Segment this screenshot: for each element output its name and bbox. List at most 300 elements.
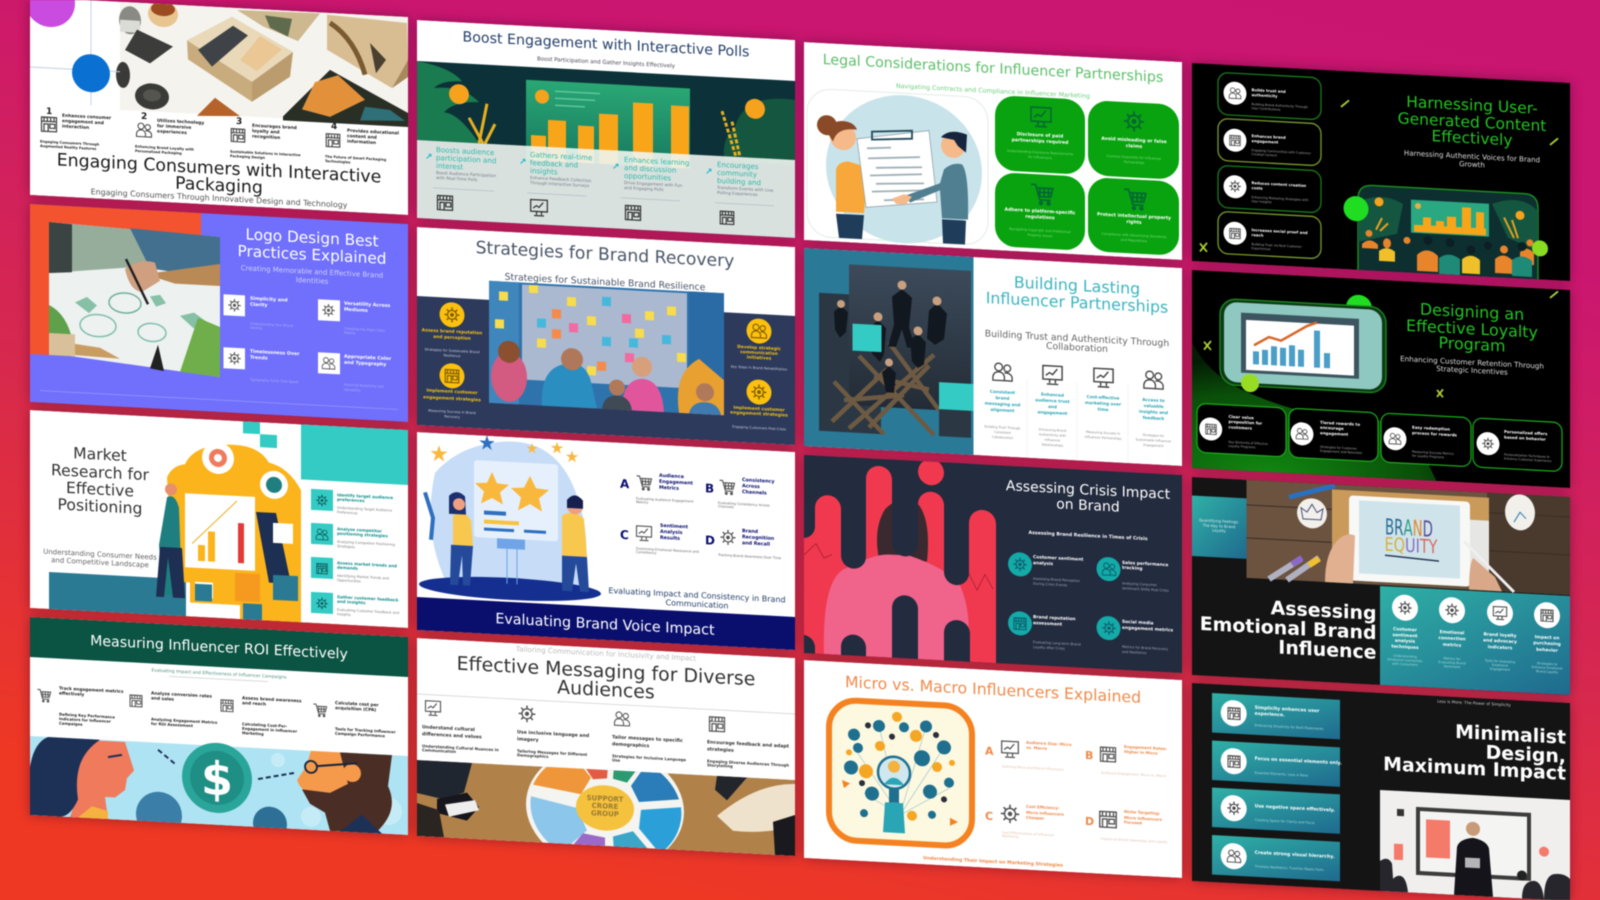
slide: Market Research for Effective Positioning (30, 410, 408, 628)
item C (985, 802, 1065, 841)
metric: customer sentiment: Customer sentiment (1033, 554, 1083, 563)
title (238, 228, 386, 265)
benefit 2: Relationships (1042, 443, 1063, 448)
list item 1: Preferences (337, 510, 358, 515)
item A: A (985, 745, 994, 758)
benefit 3: Measuring Success in (1086, 430, 1120, 436)
metric 3: Engagement in Influencer (242, 726, 297, 734)
item D (705, 526, 781, 560)
metric: sales performance (1096, 556, 1169, 593)
metric: social media (1096, 615, 1174, 657)
item 1: engagement and (62, 118, 104, 126)
item 2: Utilizes technology (157, 118, 204, 126)
item 4: The Future of Smart Packaging (325, 155, 387, 162)
decorative marks (1200, 92, 1558, 270)
subtitle: Growth (1459, 159, 1485, 169)
item: versatility: Versatility Across (344, 301, 391, 309)
card 1: Disclosure of paid (1017, 131, 1063, 140)
card 3: Enhancing Marketing Strategies with (1252, 195, 1308, 202)
rating illustration: ★ (429, 442, 449, 468)
title: Strategies for Brand Recovery (476, 238, 734, 272)
metric: social media: engagement metrics (1122, 625, 1174, 634)
item 4: information (347, 139, 376, 146)
handshake illustration (807, 88, 988, 248)
card 2 (1218, 118, 1321, 166)
left item 2: engagement strategies (423, 394, 481, 403)
product photo (116, 0, 408, 127)
item 4: Technologies (325, 159, 351, 164)
card 3: Property Issues (1027, 233, 1053, 238)
lime circle (1532, 240, 1548, 257)
title: Assessing (1271, 597, 1377, 625)
right item 1: initiatives (747, 354, 772, 362)
card 4 (1473, 418, 1562, 472)
metric 4 (1532, 601, 1562, 675)
point 4: Polling Experiences (717, 190, 758, 197)
item 4: 4 (331, 122, 337, 132)
item C: Sentiment (660, 523, 689, 530)
metric: social media: and Resilience (1122, 650, 1147, 655)
card 3: Adhere to platform-specific (1005, 207, 1076, 216)
card 4: and Regulations (1121, 238, 1148, 243)
metric 1: Customer (1393, 626, 1418, 633)
item B: Audience Engagement: Micro vs. Macro (1101, 771, 1166, 778)
orange illustration (156, 439, 301, 622)
card 1: for Influencers (1028, 155, 1052, 160)
point 2: ↗ (519, 157, 527, 168)
benefit 2: Authenticity with (1039, 432, 1066, 438)
card 2: Partnerships (1124, 160, 1145, 165)
point 4: community (717, 168, 757, 179)
card 2: Created Content (1252, 152, 1278, 158)
bar 1: Embracing Simplicity for Bold Statements (1255, 723, 1324, 731)
metric 4: Enhance Emotional (1532, 665, 1562, 671)
metric: customer sentiment: analysis (1033, 560, 1054, 567)
card 4: Personalization Techniques to (1504, 453, 1550, 459)
column 4 (707, 717, 790, 772)
teamwork photo (819, 263, 971, 439)
bar 2 (1212, 741, 1342, 787)
card 3 (1218, 165, 1321, 213)
subtitle: Identities (296, 276, 329, 286)
card 2 (1088, 100, 1179, 180)
benefit 4: Strategies for (1143, 433, 1165, 438)
left item 1: Resilience (443, 353, 461, 358)
item B: Consistency (742, 477, 775, 485)
title: Audiences (557, 676, 655, 704)
subtitle: Engaging Consumers Through Innovative Design and Technology (91, 187, 348, 210)
bar 2: Focus on essential elements only. (1255, 756, 1342, 766)
slide: Building Lasting Influencer Partnerships (804, 248, 1182, 466)
item: timelessness: Typography Fonts That Speak (249, 378, 299, 384)
metric: sales performance: Sentiment Shifts Post-Crisis (1122, 586, 1169, 593)
item D: Micro Influencers (1124, 815, 1163, 822)
point 3: opportunities (624, 171, 671, 182)
column 2: imagery (517, 736, 539, 743)
metric: customer sentiment: Assessing Brand Perception (1033, 577, 1080, 583)
metric 2: Sentiment (1444, 664, 1461, 669)
point 2: Gathers real-time (530, 150, 592, 162)
metric 4: Campaign Performance (335, 731, 385, 738)
item: simplicity: Understanding Your Brand (250, 322, 293, 328)
card 4 (1218, 211, 1321, 259)
subtitle (1400, 354, 1544, 379)
crosshair lines (30, 0, 120, 107)
right item 2 (730, 378, 788, 432)
item A (985, 738, 1072, 772)
right item 1: Key Steps in Brand Rehabilitation (731, 365, 787, 372)
list item 2: Analyzing Competitor Positioning (337, 540, 395, 547)
item: simplicity: Identity (250, 326, 263, 330)
card 2: Engagement and Retention (1320, 449, 1362, 455)
point 2: Through Interactive Surveys (529, 180, 589, 188)
point 4: ↗ (705, 167, 713, 178)
bar 4 (1212, 835, 1340, 881)
benefit 4: Access to (1142, 397, 1165, 403)
metric 1: with Consumers (1392, 662, 1418, 667)
item B: Engagement Rates: (1124, 744, 1167, 751)
slide: Micro vs. Macro Influencers Explained (804, 660, 1182, 878)
metric 2 (1438, 597, 1466, 669)
column 2 (517, 705, 589, 761)
title: Practices Explained (238, 242, 386, 268)
title (1006, 478, 1171, 518)
metric: brand reputation: assessment (1033, 620, 1062, 628)
item D (1085, 807, 1167, 844)
card 3: Measuring Success Metrics (1412, 450, 1454, 456)
metric 4: Impact on (1535, 634, 1559, 641)
card 3: User Insights (1252, 199, 1272, 204)
subtitle: Understanding Consumer Needs (43, 548, 157, 562)
card 1: Builds trust and (1252, 87, 1286, 94)
item 2: Personalized Packaging (135, 149, 182, 156)
metric 3: indicators (1488, 644, 1513, 651)
metric: brand reputation: Evaluating Long-term Brand (1033, 640, 1081, 647)
item D: D (1085, 815, 1094, 828)
card 2: claims (1126, 143, 1143, 150)
item A: Metrics (659, 485, 679, 492)
slide: Evaluating Brand Voice Impact (417, 427, 795, 650)
column 2: Demographics (517, 752, 549, 759)
title: Influence (1278, 637, 1377, 664)
brand equity photo: EQUITY (1384, 534, 1438, 558)
title (1406, 299, 1538, 357)
left item 2 (423, 362, 481, 420)
item D: and Recall (742, 540, 770, 548)
rating illustration: ★ (478, 430, 496, 455)
benefit 4 (1136, 370, 1172, 448)
green glow shape (1192, 342, 1437, 487)
item: versatility: Mediums (344, 307, 368, 314)
point 2: Enhance Feedback Collection (530, 175, 592, 183)
metric 3: Assess brand awareness (242, 695, 302, 704)
list item 1: preferences (337, 497, 365, 503)
teal side panel (804, 248, 974, 455)
list item 3 (311, 557, 397, 585)
card 4: based on behavior (1504, 435, 1546, 442)
metric 1: effectively (59, 691, 85, 698)
decorative marks (1204, 273, 1558, 403)
card 2: engagement (1252, 138, 1279, 145)
metric 3: and reach (242, 700, 266, 707)
subtitle (43, 548, 157, 570)
item 3 (230, 117, 301, 162)
subtitle: Strategies for Sustainable Brand Resilience (505, 272, 706, 293)
item 3: 3 (236, 117, 242, 127)
item 1: interaction (62, 123, 89, 131)
subtitle: Strategic Incentives (1436, 364, 1508, 377)
column 4: strategies (707, 746, 734, 754)
point 4 (705, 159, 774, 227)
item: timelessness: Timelessness Over (250, 349, 300, 357)
point 3: and Engaging Polls (624, 185, 664, 192)
subtitle (985, 329, 1169, 358)
item A: Defining Micro and Macro Influencers (1002, 764, 1064, 772)
bar 4: Create strong visual hierarchy. (1255, 850, 1335, 860)
item: simplicity: Simplicity and (250, 296, 288, 304)
column 3: demographics (612, 741, 650, 749)
metric 3: Engagement (1490, 667, 1511, 672)
point 4: building and (717, 176, 761, 187)
subtitle: Navigating Contracts and Compliance in Influencer Marketing (896, 83, 1090, 100)
card 4: Protect intellectual property (1097, 212, 1171, 221)
header band (30, 617, 408, 677)
point 1: ↗ (425, 152, 433, 163)
title: on Brand (1056, 496, 1120, 516)
metric: customer sentiment (1008, 552, 1083, 588)
card 1: Key Elements of Effective (1228, 440, 1268, 446)
column 1: Communication (422, 747, 456, 754)
item 4: Provides educational (347, 128, 400, 137)
title: Logo Design Best (245, 225, 379, 250)
card 2: engagement (1320, 430, 1348, 437)
slide: Designing an Effective Loyalty Program (1192, 270, 1570, 494)
item C: Micro Influencers (1026, 810, 1065, 817)
point 4: Encourages (717, 160, 759, 171)
title: Assessing Crisis Impact (1006, 478, 1171, 503)
list item 1: Identify target audience (337, 492, 393, 500)
circle: purple (25, 0, 75, 28)
overline: Tailoring Communication for Inclusivity and Impact (515, 644, 696, 663)
slide: Logo Design Best Practices Explained (30, 204, 408, 422)
bar 3 (1212, 788, 1340, 834)
teal corner panel (301, 424, 408, 485)
metric: social media: Metrics for Brand Recovery (1122, 645, 1168, 651)
item B: Channels (742, 489, 767, 497)
column 3: Tailor messages to specific (612, 734, 683, 744)
list item 1 (311, 489, 393, 517)
item A: Engagement (659, 479, 694, 487)
title: Emotional Brand (1200, 613, 1377, 644)
left item 1 (422, 301, 482, 359)
point 2: insights (530, 166, 558, 176)
title: Engaging Consumers with Interactive (57, 150, 381, 188)
metric 1: Defining Key Performance (59, 712, 115, 720)
metric 2: for ROI Assessment (151, 721, 193, 728)
card 3: Reduces content creation (1252, 180, 1307, 188)
metric 1: techniques (1391, 644, 1419, 651)
teal left panel (1192, 496, 1246, 559)
point 1 (425, 144, 496, 213)
card 1: partnerships required (1012, 137, 1068, 146)
column 4: Engaging Diverse Audiences Through (707, 758, 789, 768)
item C: Cost-Effectiveness of Influencer (1002, 830, 1055, 837)
metric: brand reputation: Brand reputation (1033, 614, 1075, 622)
benefit 3: Cost-effective (1087, 394, 1120, 401)
item A: Audience (659, 473, 685, 480)
item D: Tracking Brand Awareness Over Time (717, 553, 781, 560)
bar 3: Use negative space effectively. (1255, 803, 1335, 814)
left item 2: Implement customer (426, 387, 478, 396)
item D: Impact on Brand Awareness and Loyalty (1101, 837, 1167, 844)
item 3: Packaging Design (230, 154, 266, 160)
column 2: Use inclusive language and (517, 729, 589, 739)
column 3: Strategies for Inclusive Language (612, 753, 686, 762)
metric: brand reputation: Loyalty After Crisis (1033, 645, 1065, 651)
item B (1085, 742, 1167, 778)
item C: C (985, 810, 993, 823)
item C: Consistency (636, 550, 657, 555)
card 1: customers (1228, 424, 1253, 431)
benefit 4: insights and (1139, 409, 1168, 415)
left item 1: Strategies for Sustainable Brand (424, 347, 480, 354)
point 2 (519, 149, 592, 219)
right item 2: Engaging Customers Post-Crisis (732, 425, 786, 432)
card 4: Increases social proof and (1252, 227, 1308, 235)
metric 4: purchasing (1533, 640, 1561, 648)
subtitle: Creating Memorable and Effective Brand (241, 264, 383, 280)
subtitle (1404, 148, 1540, 172)
rating illustration: ★ (565, 447, 579, 467)
item C: Analysis (660, 529, 683, 536)
green circle (1344, 196, 1368, 222)
title: Market (73, 444, 127, 465)
item B: Channels (718, 504, 734, 509)
item D: Focused (1124, 819, 1142, 825)
metric: brand reputation (1008, 611, 1081, 652)
item D: Brand (742, 528, 759, 535)
bar 1 (1212, 693, 1340, 739)
orange block (30, 204, 201, 363)
slide: Effective Messaging for Diverse Audiences (417, 638, 795, 880)
card 2: encourage (1320, 425, 1344, 431)
metric 4: behavior (1536, 647, 1559, 654)
bar 4: Timeless Aesthetics: Function Meets Form (1254, 864, 1324, 872)
metric 1: sentiment (1392, 632, 1418, 639)
metric 1: analysis (1395, 638, 1415, 645)
benefit 2: audience trust (1035, 397, 1070, 404)
metric: customer sentiment: During Crisis Events (1033, 582, 1067, 587)
item 4: content and (347, 133, 377, 141)
item 1: Augmented Reality Features (40, 144, 96, 151)
list item 1: Understanding Target Audience (337, 506, 392, 513)
card 1: User Contributions (1252, 106, 1281, 112)
subtitle: Communication (665, 598, 729, 610)
card 4: Compliance with Advertising Standards (1102, 232, 1167, 239)
card 1 (1197, 403, 1286, 457)
item B: Evaluating Consistency Across (718, 501, 770, 508)
audience illustration (1358, 185, 1538, 288)
left item 2: Measuring Success in Brand (428, 409, 476, 415)
left item 1: Assess brand reputation (422, 327, 482, 336)
metric: sales performance: Analyzing Consumer (1122, 581, 1157, 587)
metric 1: Track engagement metrics (59, 686, 124, 695)
item 1: 1 (46, 107, 52, 117)
checker squares (243, 421, 277, 448)
list item 3: Identifying Market Trends and (337, 574, 389, 580)
benefit 2: Enhancing Brand (1039, 427, 1066, 433)
column 1: differences and values (422, 731, 482, 740)
title: Maximum Impact (1383, 753, 1566, 785)
title (986, 271, 1168, 317)
subtitle: and Competitive Landscape (51, 556, 149, 569)
list item 2: Analyze competitor (337, 526, 382, 534)
title: Evaluating Brand Voice Impact (495, 611, 715, 639)
point 3: ↗ (612, 162, 620, 173)
column 3: Use (612, 757, 620, 763)
item A: Evaluating Audience Engagement (636, 497, 694, 504)
card 1: authenticity (1252, 92, 1278, 99)
metric 2: Analyzing Engagement Metrics (151, 716, 218, 725)
subtitle: Building Trust and Authenticity Through (985, 329, 1169, 349)
card 3: regulations (1025, 214, 1055, 221)
list item 2: positioning strategies (337, 531, 388, 538)
benefit 1: Building Trust Through (985, 425, 1020, 430)
point 4: Transform Events with Live (716, 185, 774, 193)
metric 1: Indicators for Influencer (59, 716, 111, 724)
title: Designing an (1420, 300, 1524, 324)
metric 4: Tools for Tracking Influencer (335, 726, 396, 734)
metric 2: Metrics for (1444, 656, 1461, 661)
title: Effectively (1431, 127, 1513, 149)
metric: social media: Social media (1122, 619, 1153, 626)
subtitle: Enhancing Customer Retention Through (1400, 354, 1544, 371)
slide: Strategies for Brand Recovery (417, 227, 795, 445)
card 2 (1289, 408, 1378, 462)
metric 2: Evaluating Brand (1438, 660, 1466, 665)
metric 1: Understanding (1393, 654, 1417, 659)
item B: B (705, 481, 714, 496)
card 1: Understanding Disclosure Requirements (1007, 149, 1073, 156)
translucent panel (417, 140, 795, 238)
item: versatility: Choosing the Right Color (344, 327, 386, 333)
slide: Minimalist Design, Maximum Impact (1192, 683, 1570, 900)
teal left panel: Loyalty (1212, 528, 1227, 533)
metric 2: connection (1438, 635, 1466, 642)
list item 2: Strategies (337, 544, 355, 549)
navy footer (417, 597, 795, 650)
item 2: experiences (157, 129, 187, 136)
title: Program (1438, 333, 1506, 356)
illustration: ROI coin and faces: $ (201, 751, 233, 807)
title: Building Lasting (1014, 273, 1140, 298)
metric 2 (130, 689, 218, 729)
left item 2: Recovery (444, 414, 460, 419)
metric 3 (1483, 599, 1517, 672)
item 2: Enhancing Brand Loyalty with (135, 145, 194, 152)
benefit 3: marketing over (1085, 400, 1122, 407)
overline: Less is More: The Power of Simplicity (1437, 698, 1512, 707)
item 3: loyalty and (252, 128, 280, 136)
list item 4: and insights (337, 599, 366, 605)
benefit 1: Consistent (990, 389, 1015, 395)
benefit 2: and (1048, 404, 1057, 409)
rating illustration (419, 427, 601, 605)
metric 3: Brand loyalty (1483, 631, 1517, 639)
title: Boost Engagement with Interactive Polls (463, 29, 749, 61)
benefit 1: Consistent (994, 430, 1012, 435)
item A: vs. Macro (1026, 745, 1047, 751)
